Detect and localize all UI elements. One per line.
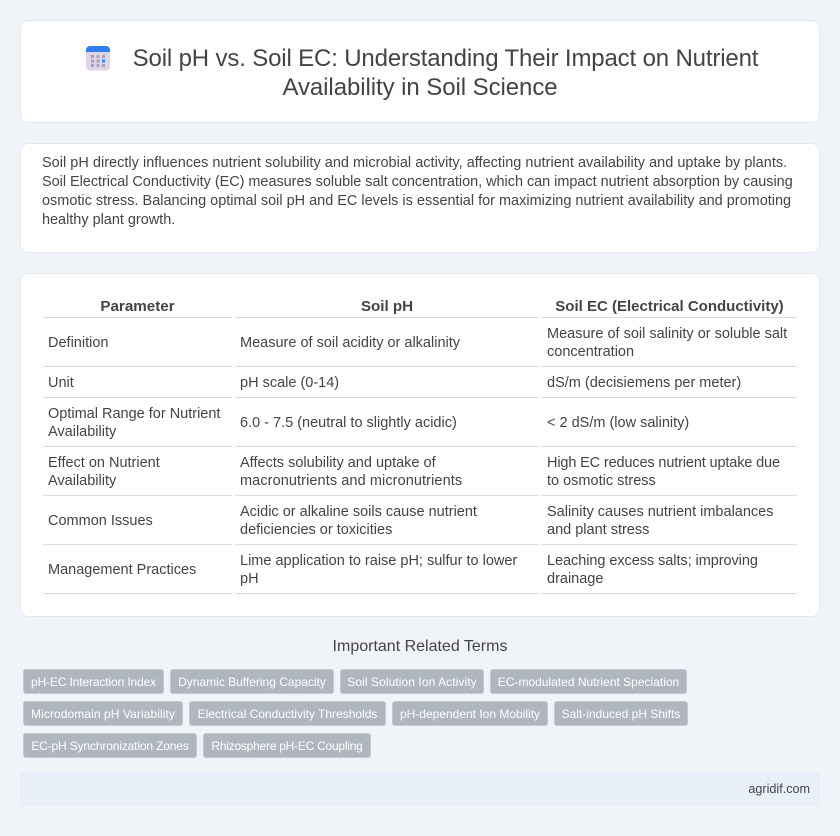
related terms tags [23,669,688,758]
row: Unit [48,375,741,391]
text block: intro paragraph: Soil pH directly influences nutrient solubility and microbial activity, affecting nutrient availability and uptake by plants. [42,155,787,171]
row: Effect on Nutrient Availability: to osmotic stress [547,473,656,489]
tag: Electrical Conductivity Thresholds [198,707,377,721]
tag: Salt-induced pH Shifts [562,707,680,721]
tag: Microdomain pH Variability [31,707,175,721]
row: Definition: concentration [547,344,634,360]
row: Common Issues: deficiencies or toxicities [240,522,392,538]
row: Optimal Range: Availability [48,424,116,440]
footer source text: agridif.com [748,782,810,796]
row: Management Practices: Leaching excess salts; improving [547,553,758,569]
row: Common Issues: Salinity causes nutrient imbalances [547,504,773,520]
tag [23,669,164,694]
row: Common Issues: and plant stress [547,522,649,538]
row: Effect on Nutrient Availability: Effect on Nutrient [48,455,160,471]
row: Definition: Definition [48,335,108,351]
row: Definition: Measure of soil acidity or alkalinity [240,335,460,351]
column header: Parameter: Parameter [100,298,175,315]
title: Soil pH vs. Soil EC: Understanding Their Impact on Nutrient [133,45,758,72]
text block: intro paragraph: Soil Electrical Conductivity (EC) measures soluble salt concentration, which can impact nutrient absorption by causing [42,174,793,190]
row: Unit: Unit [48,375,74,391]
text block: intro paragraph: healthy plant growth. [42,212,175,228]
row: Management Practices [48,553,758,587]
text block: intro paragraph [42,155,793,228]
tag: Soil Solution Ion Activity [347,675,477,689]
tag: EC-modulated Nutrient Speciation [498,675,679,689]
row: Management Practices: drainage [547,571,603,587]
row: Optimal Range: < 2 dS/m (low salinity) [547,415,689,431]
panel: comparison table card [20,273,820,617]
row: Effect on Nutrient Availability: macronutrients and micronutrients [240,473,462,489]
tag: Dynamic Buffering Capacity [178,675,326,689]
tag: pH-EC Interaction Index [31,675,156,689]
row: Effect on Nutrient Availability [48,455,780,489]
row: Optimal Range: Optimal Range for Nutrient [48,406,220,422]
row: Common Issues [48,504,773,538]
column header: Soil EC: Soil EC (Electrical Conductivity) [555,298,784,315]
row: Effect on Nutrient Availability: Affects solubility and uptake of [240,455,436,471]
row: Management Practices: Lime application to raise pH; sulfur to lower [240,553,517,569]
tag: pH-dependent Ion Mobility [400,707,540,721]
tag: EC-pH Synchronization Zones [31,739,189,753]
row: Common Issues: Acidic or alkaline soils cause nutrient [240,504,477,520]
row: Management Practices: pH [240,571,259,587]
panel: title card [20,20,820,123]
comparison table [43,298,797,594]
tag [23,701,183,726]
title: Availability in Soil Science [282,74,558,101]
tag [203,733,371,758]
heading: Important Related Terms: Important Related Terms [333,638,507,655]
tag: Rhizosphere pH-EC Coupling [211,739,363,753]
row: Management Practices: Management Practices [48,562,196,578]
tag [392,701,548,726]
row: Definition: Measure of soil salinity or soluble salt [547,326,787,342]
column header: Soil pH: Soil pH [361,298,413,315]
row: Optimal Range: 6.0 - 7.5 (neutral to slightly acidic) [240,415,457,431]
panel: intro text card [20,143,820,253]
icon: calendar [86,46,110,70]
tag [340,669,484,694]
row: Unit: dS/m (decisiemens per meter) [547,375,741,391]
tag [490,669,687,694]
tag [23,733,197,758]
row: Unit: pH scale (0-14) [240,375,339,391]
row: Effect on Nutrient Availability: Availability [48,473,116,489]
row: Effect on Nutrient Availability: High EC reduces nutrient uptake due [547,455,780,471]
row: Definition [48,326,788,360]
tag [170,669,334,694]
footer bar [20,772,820,806]
text block: intro paragraph: osmotic stress. Balancing optimal soil pH and EC levels is essential for maximizing nutrient availability and promoting [42,193,791,209]
tag [189,701,386,726]
tag [554,701,688,726]
row: Optimal Range [48,406,689,440]
row: Common Issues: Common Issues [48,513,153,529]
title [133,45,758,101]
